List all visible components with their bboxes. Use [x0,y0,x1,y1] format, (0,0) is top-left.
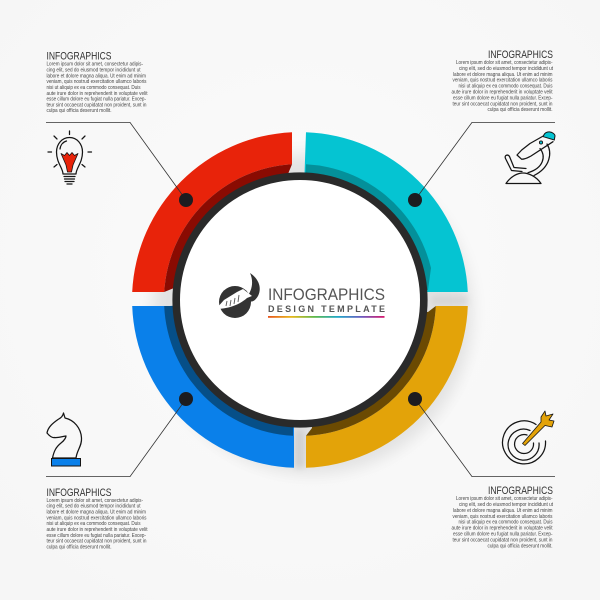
text block top left: teur sint occaecat cupidatat non proident, sunt in [46,102,146,108]
panel: red segment [132,132,300,300]
center logo [216,273,385,318]
text block top left: INFOGRAPHICS [46,50,112,62]
panel: blue segment [132,300,300,468]
text block bottom left: teur sint occaecat cupidatat non proident, sunt in [46,539,146,545]
text block top right: culpa qui officia deserunt mollit. [488,107,552,113]
logo mark [216,273,260,318]
icon: microscope [505,132,555,184]
leader bottom right [408,392,555,477]
text block top right: aute irure dolor in reprehenderit in voluptate velit [452,90,553,96]
text block bottom right: cing elit, sed do eiusmod tempor incididunt ut [459,502,553,508]
text block bottom right [452,485,553,549]
icon: light bulb [48,131,92,184]
leader bottom left [46,392,193,477]
text block bottom left [46,487,148,550]
text block bottom right: Lorem ipsum dolor sit amet, consectetur adipis- [456,496,553,502]
leader top left [46,122,193,207]
text block top right: Lorem ipsum dolor sit amet, consectetur adipis- [456,60,553,66]
center ring [176,176,424,424]
text block top right: cing elit, sed do eiusmod tempor incididunt ut [459,66,553,72]
text block top right: teur sint occaecat cupidatat non proident, sunt in [452,101,552,107]
text block bottom right: nisi ut aliquip ex ea commodo consequat. Duis [458,520,553,526]
text block top right: labore et dolore magna aliqua. Ut enim ad minim [453,72,553,78]
text block top left: esse cillum dolore eu fugiat nulla pariatur. Excep- [46,97,146,103]
logo title: INFOGRAPHICS [268,285,385,304]
text block bottom right: INFOGRAPHICS [488,485,553,497]
text block bottom left: aute irure dolor in reprehenderit in voluptate velit [46,527,148,533]
icon: chess knight [47,413,82,466]
text block top right: INFOGRAPHICS [488,49,553,61]
rainbow bar [268,316,384,318]
text block top right [452,49,553,113]
panel: yellow segment [300,300,468,468]
text block top left: culpa qui officia deserunt mollit. [46,108,112,114]
icon: target with arrow [503,411,554,464]
text block top left [46,50,148,114]
soft shadow under ring [152,154,472,474]
leader top right [408,122,555,207]
text block bottom left: INFOGRAPHICS [46,487,112,499]
text block bottom left: labore et dolore magna aliqua. Ut enim ad minim [46,510,146,516]
text block bottom left: Lorem ipsum dolor sit amet, consectetur adipis- [46,498,143,504]
text block bottom right: esse cillum dolore eu fugiat nulla pariatur. Excep- [453,532,553,538]
text block top right: nisi ut aliquip ex ea commodo consequat. Duis [458,84,553,90]
text block bottom right: labore et dolore magna aliqua. Ut enim ad minim [453,508,553,514]
text block top left: labore et dolore magna aliqua. Ut enim ad minim [46,73,146,79]
text block top left: nisi ut aliquip ex ea commodo consequat. Duis [46,85,141,91]
panel: teal segment [300,132,468,300]
text block top right: esse cillum dolore eu fugiat nulla pariatur. Excep- [453,95,553,101]
text block top left: veniam, quis nostrud exercitation ullamco laboris [46,79,147,85]
text block bottom left: esse cillum dolore eu fugiat nulla pariatur. Excep- [46,533,146,539]
text block bottom left: cing elit, sed do eiusmod tempor incididunt ut [46,504,141,510]
text block bottom right: veniam, quis nostrud exercitation ullamco laboris [452,514,553,520]
text block top left: aute irure dolor in reprehenderit in voluptate velit [46,91,148,97]
text block bottom left: culpa qui officia deserunt mollit. [46,544,112,550]
text block top left: cing elit, sed do eiusmod tempor incididunt ut [46,67,141,73]
text block bottom right: culpa qui officia deserunt mollit. [488,543,552,549]
text block bottom right: aute irure dolor in reprehenderit in voluptate velit [452,526,553,532]
text block bottom right: teur sint occaecat cupidatat non proident, sunt in [452,537,552,543]
text block bottom left: veniam, quis nostrud exercitation ullamco laboris [46,515,147,521]
text block top left: Lorem ipsum dolor sit amet, consectetur adipis- [46,62,143,68]
text block top right: veniam, quis nostrud exercitation ullamco laboris [452,78,553,84]
logo subtitle: DESIGN TEMPLATE [268,304,385,314]
text block bottom left: nisi ut aliquip ex ea commodo consequat. Duis [46,521,141,527]
